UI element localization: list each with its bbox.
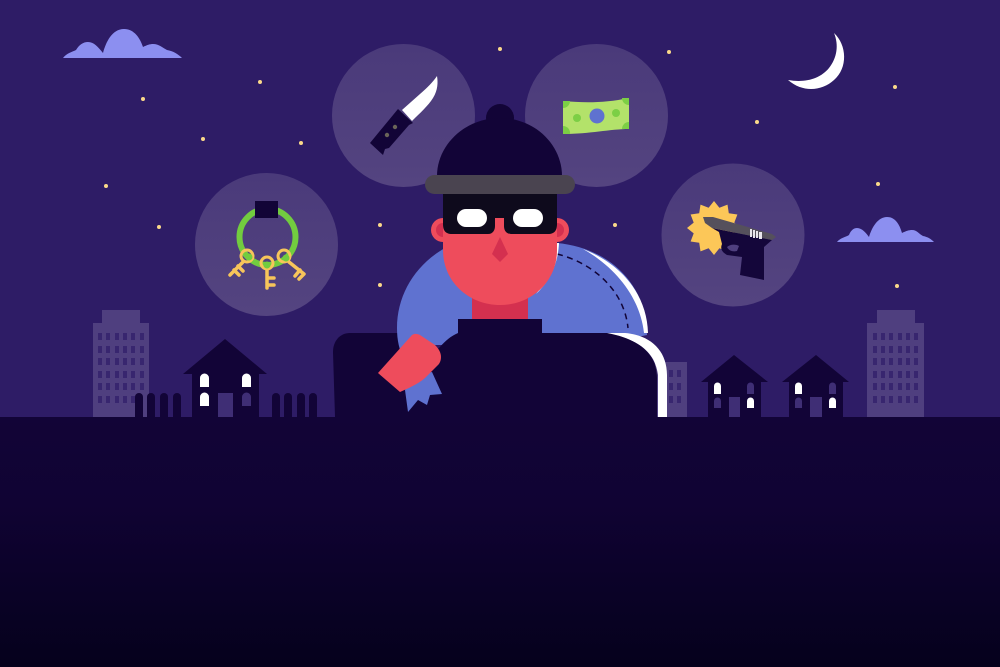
ground bbox=[0, 417, 1000, 667]
icon: pistol with muzzle flash bbox=[687, 201, 776, 280]
house: left bbox=[183, 339, 267, 417]
face bbox=[443, 200, 557, 305]
bubble: money bbox=[525, 44, 668, 187]
torn sleeve bbox=[405, 372, 442, 412]
beanie bbox=[425, 104, 575, 194]
chair back: main bbox=[400, 319, 657, 417]
building: left tower bbox=[93, 310, 149, 417]
ears bbox=[431, 218, 569, 242]
building: right tower bbox=[867, 310, 924, 417]
gloved hand bbox=[378, 334, 441, 392]
moon bbox=[788, 33, 844, 89]
cloud: top left bbox=[63, 29, 182, 58]
icon: banknote bbox=[563, 98, 629, 134]
burglar figure bbox=[333, 104, 667, 417]
stars bbox=[104, 47, 899, 288]
chair back: white rim bbox=[605, 333, 667, 417]
cloud: right bbox=[837, 217, 934, 242]
bubble: keys bbox=[195, 173, 338, 316]
mask bbox=[443, 194, 557, 234]
building: small behind chair bbox=[655, 362, 687, 417]
icon: keys bbox=[230, 201, 304, 288]
face highlight bbox=[536, 243, 559, 294]
bubble: gun bbox=[662, 164, 804, 306]
icon: knife bbox=[370, 76, 438, 155]
house: right one bbox=[701, 355, 768, 417]
nose bbox=[492, 237, 508, 262]
neck bbox=[472, 285, 528, 321]
jacket highlight bbox=[583, 249, 648, 333]
jacket stitching bbox=[557, 254, 628, 328]
fence: right bbox=[272, 393, 317, 417]
house: right two bbox=[782, 355, 849, 417]
fence: left bbox=[135, 393, 181, 417]
bubble: knife bbox=[332, 44, 475, 187]
chair back: left bbox=[333, 333, 410, 417]
jacket bbox=[397, 243, 647, 362]
